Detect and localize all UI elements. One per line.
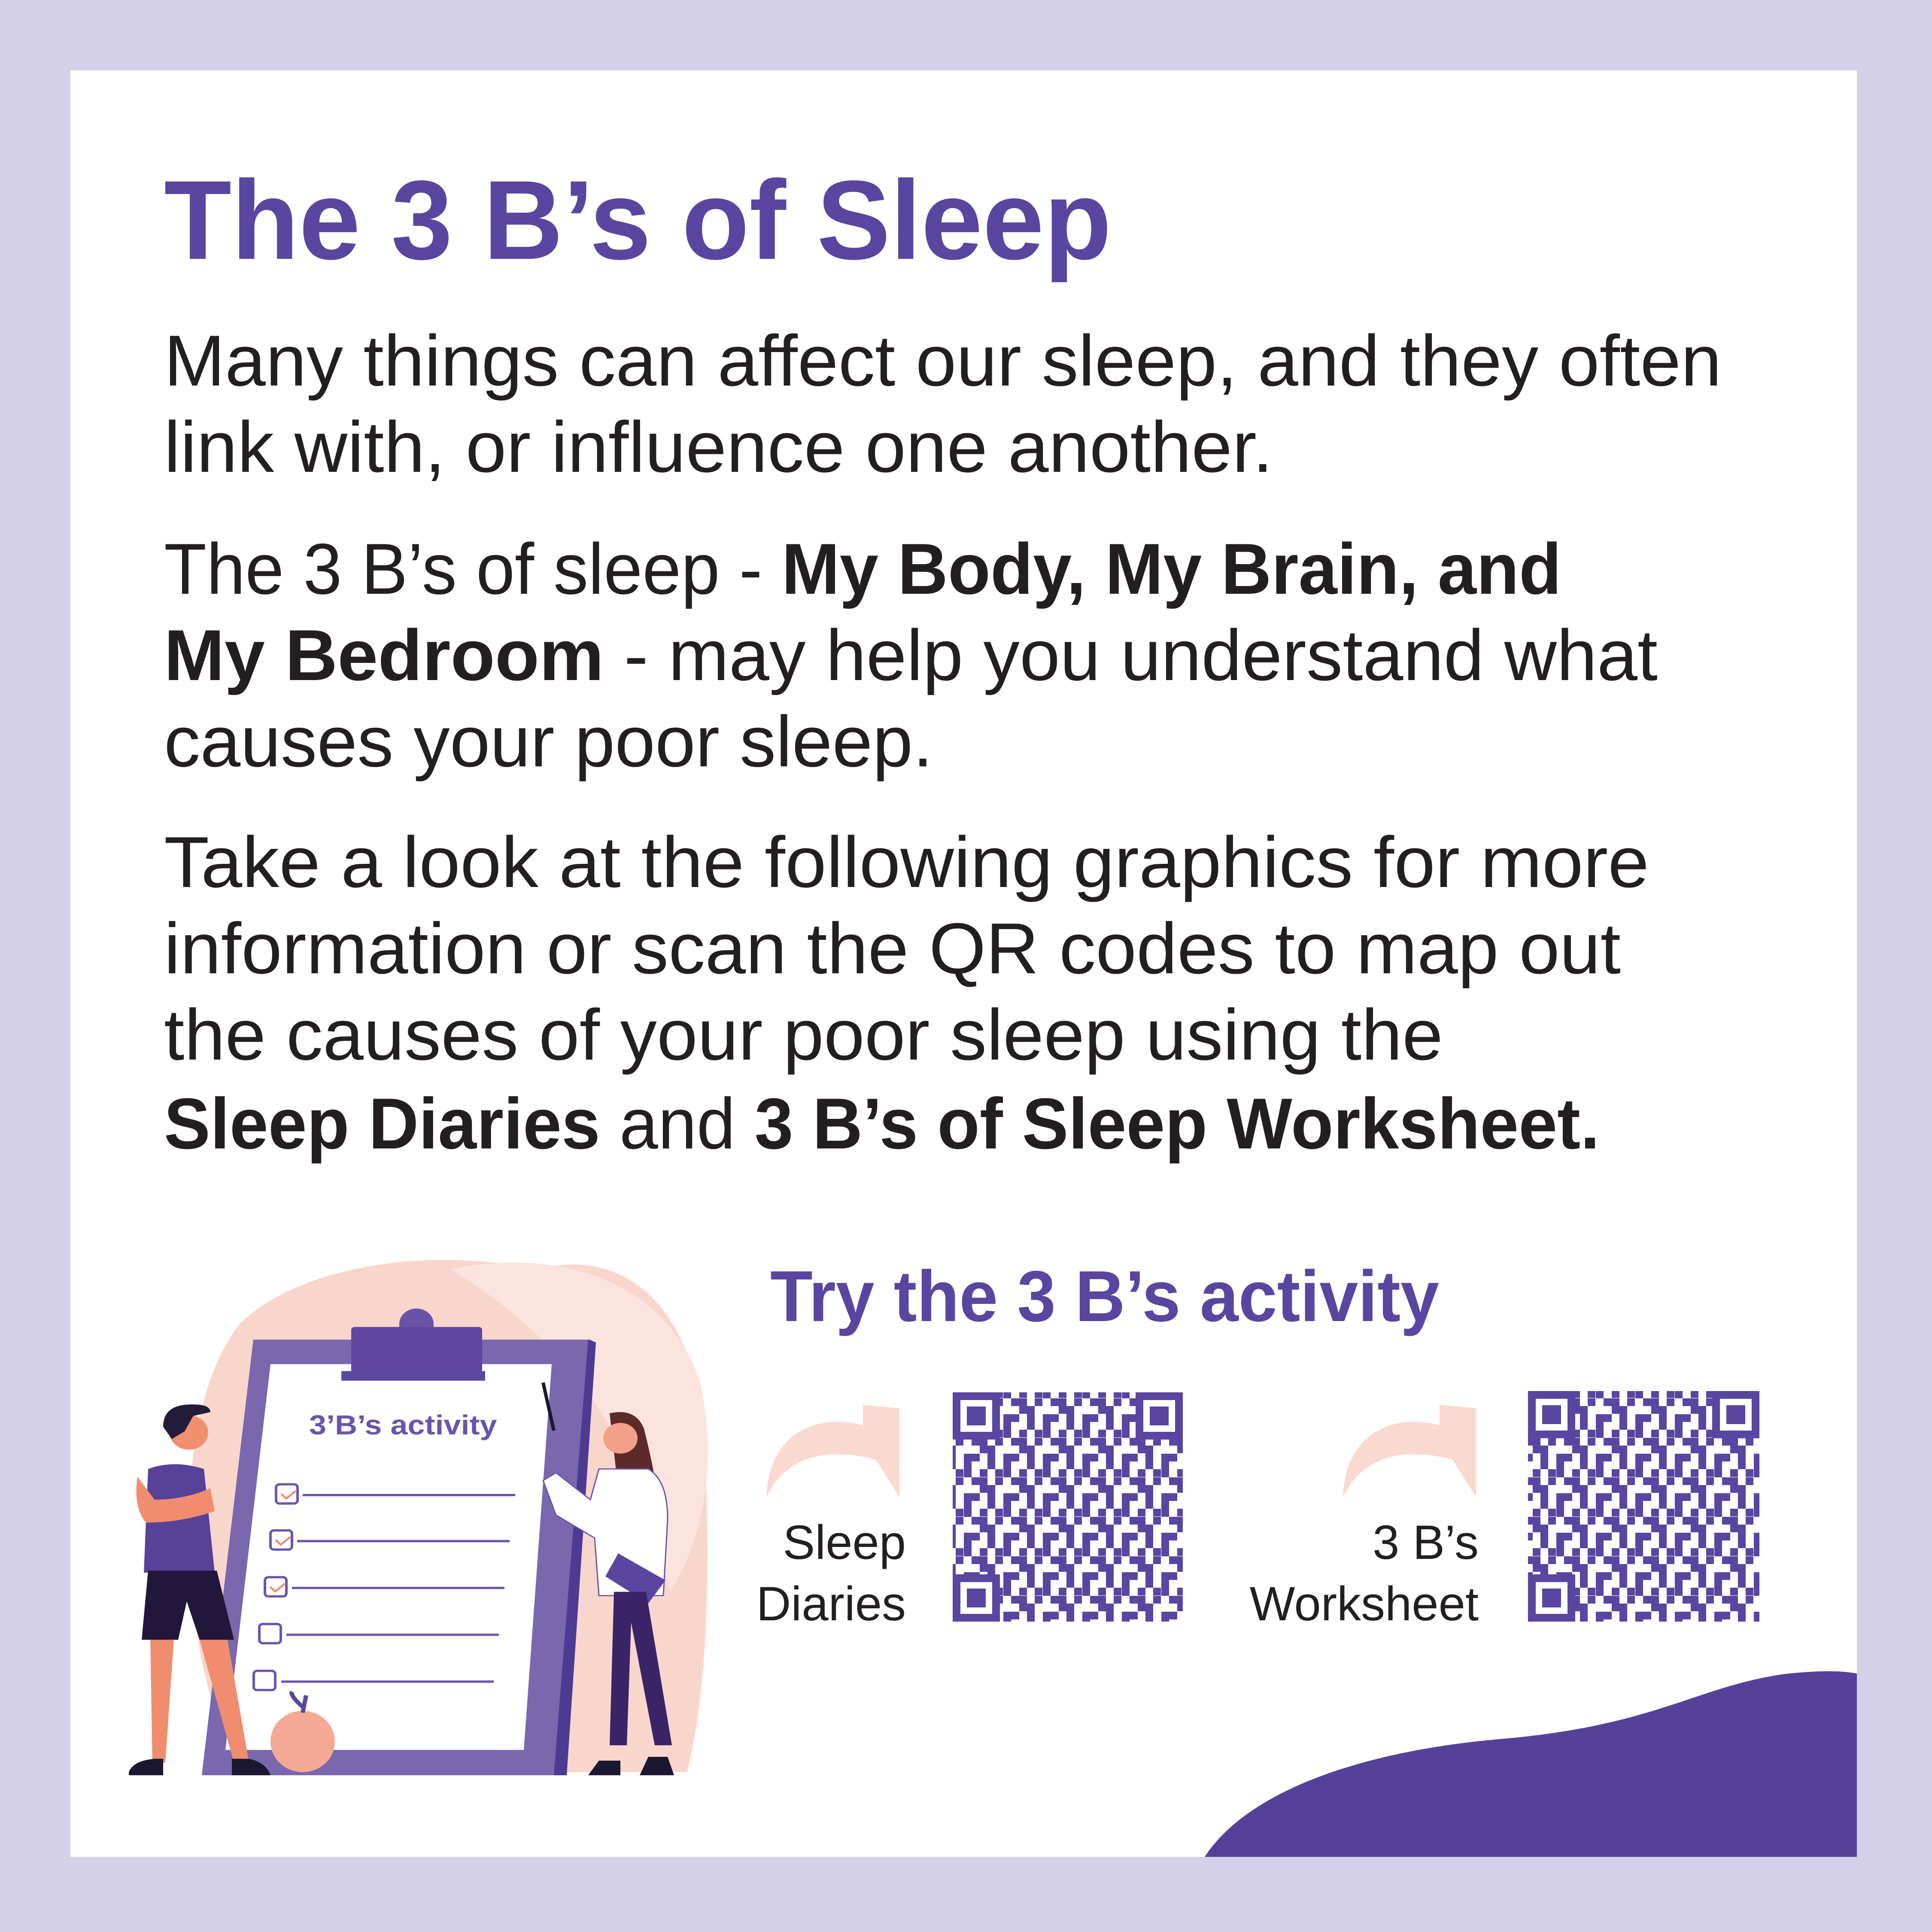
graphics paragraph: the causes of your poor sleep using the xyxy=(164,994,1443,1075)
clipboard board xyxy=(202,1340,594,1775)
graphics paragraph: Sleep Diaries and 3 B’s of Sleep Worksheet. xyxy=(164,1083,1600,1164)
activity heading: Try the 3 B’s activity xyxy=(770,1256,1439,1337)
graphics paragraph xyxy=(164,822,1649,1164)
intro paragraph xyxy=(164,320,1722,487)
label: worksheet: 3 B’s xyxy=(1373,1516,1479,1569)
woman xyxy=(543,1382,674,1775)
apple xyxy=(270,1711,335,1772)
QR code: worksheet xyxy=(1528,1391,1759,1622)
checklist xyxy=(254,1484,515,1690)
label: sleep diaries xyxy=(756,1516,906,1631)
decorative wave bottom right xyxy=(1205,1671,1857,1857)
title: The 3 B’s of Sleep xyxy=(164,157,1112,283)
man xyxy=(129,1404,270,1775)
label: sleep diaries: Diaries xyxy=(756,1577,906,1631)
clip xyxy=(399,1309,434,1334)
arrow: worksheet xyxy=(1343,1405,1476,1497)
3 B's paragraph: causes your poor sleep. xyxy=(164,701,933,782)
3 B's paragraph: The 3 B’s of sleep - My Body, My Brain, and xyxy=(164,529,1561,609)
label: worksheet: Worksheet xyxy=(1250,1577,1479,1631)
label: sleep diaries: Sleep xyxy=(783,1516,906,1569)
paper xyxy=(225,1364,552,1750)
3 B's paragraph: My Bedroom - may help you understand what xyxy=(164,615,1658,696)
arrow: sleep diaries xyxy=(766,1405,899,1497)
graphics paragraph: Take a look at the following graphics for more xyxy=(164,822,1649,902)
graphics paragraph: information or scan the QR codes to map out xyxy=(164,908,1621,989)
blob background xyxy=(189,1260,708,1772)
QR code: sleep diaries xyxy=(953,1392,1183,1622)
intro paragraph: link with, or influence one another. xyxy=(164,407,1273,487)
3 B's paragraph xyxy=(164,529,1658,782)
intro paragraph: Many things can affect our sleep, and they often xyxy=(164,320,1722,401)
clipboard title: 3’B’s activity xyxy=(309,1410,497,1440)
label: worksheet xyxy=(1250,1516,1479,1631)
illustration: clipboard with people xyxy=(129,1260,708,1775)
